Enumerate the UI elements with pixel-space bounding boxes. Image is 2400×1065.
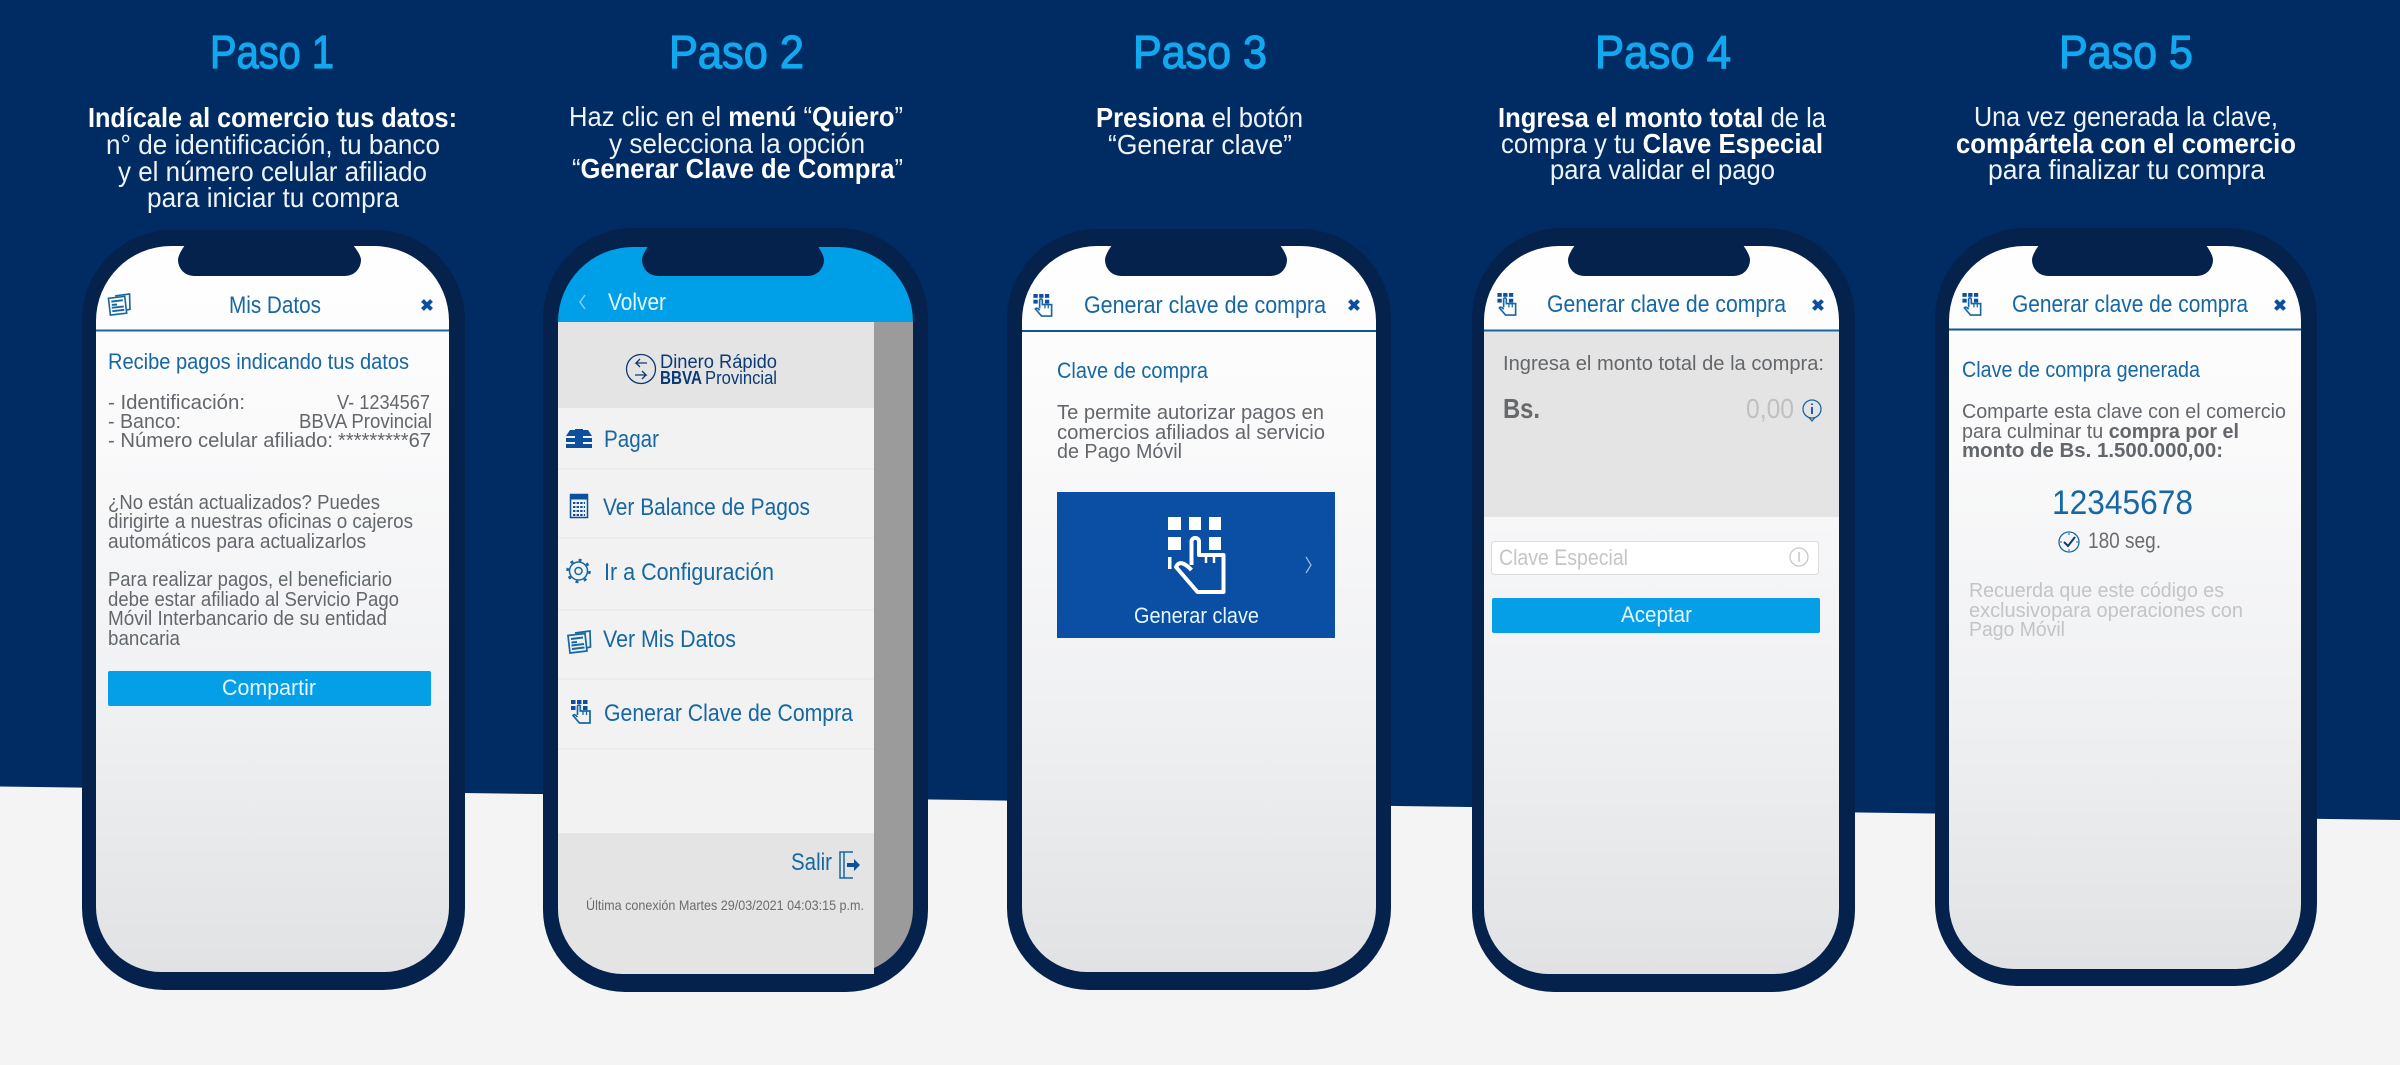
phone 5: generated key (1935, 228, 2317, 986)
paragraph: description: comercios afiliados al servicio (1057, 422, 1325, 444)
data list: - Número celular afiliado: (108, 430, 333, 452)
action card: Generar clave (1057, 492, 1335, 638)
subheading: Clave de compra generada (1962, 357, 2201, 382)
icon: clock (2059, 532, 2079, 552)
phone screen (1484, 246, 1839, 974)
heading: Paso 3: Paso 3 (1133, 26, 1267, 78)
phone frame (1935, 228, 2317, 986)
input: Clave Especial (1492, 542, 1818, 574)
data list (108, 392, 432, 452)
data list: *********67 (338, 430, 431, 452)
logo band (558, 322, 874, 408)
heading: Paso 2: Paso 2 (669, 26, 804, 78)
text block: step 2 instructions: “Generar Clave de Compra” (572, 153, 903, 184)
data list: V- 1234567 (337, 392, 430, 414)
heading: Paso 5: Paso 5 (2059, 26, 2193, 78)
step 3 column (1007, 26, 1391, 990)
paragraph: description: Te permite autorizar pagos en (1057, 402, 1324, 424)
footer band (558, 833, 874, 974)
icon: keypad with pointing hand (1168, 517, 1224, 592)
icon: keypad hand (1497, 293, 1516, 315)
paragraph: reminder: Recuerda que este código es (1969, 580, 2224, 602)
text block: step 3 instructions (1096, 102, 1303, 160)
data list: - Identificación: (108, 392, 245, 414)
paragraph: update notice: automáticos para actualizarlos (108, 531, 366, 553)
icon: close (2276, 300, 2284, 310)
icon: calculator (570, 494, 588, 518)
menu item: Ir a Configuración: Ir a Configuración (604, 559, 774, 586)
logo: Dinero Rápido BBVA Provincial: Provincial (705, 368, 777, 388)
step 5 column (1935, 26, 2317, 986)
paragraph: share key: monto de Bs. 1.500.000,00: (1962, 440, 2223, 462)
text block: step 2 instructions: y selecciona la opción (609, 128, 865, 159)
logo: Dinero Rápido BBVA Provincial (626, 352, 777, 388)
text block: step 3 instructions: “Generar clave” (1108, 129, 1292, 160)
data list: - Banco: (108, 411, 181, 433)
phone frame (1007, 229, 1391, 990)
text block: step 4 instructions: compra y tu Clave Especial (1501, 128, 1823, 159)
text block: step 5 instructions (1956, 101, 2296, 185)
screen title: Generar clave de compra (1084, 292, 1327, 319)
button: Aceptar (1492, 598, 1820, 633)
step 4 column (1472, 26, 1855, 992)
paragraph: update notice: dirigirte a nuestras oficinas o cajeros (108, 511, 413, 533)
paragraph: share key: para culminar tu compra por el (1962, 421, 2239, 443)
exit link: Salir (791, 849, 832, 876)
phone notch (2032, 245, 2213, 276)
phone screen (1022, 246, 1376, 972)
text block: step 1 instructions: n° de identificación, tu banco (106, 129, 440, 160)
currency label: Bs. (1503, 393, 1540, 424)
amount prompt: Ingresa el monto total de la compra: (1503, 353, 1824, 375)
paragraph: beneficiary notice: debe estar afiliado al Servicio Pago (108, 589, 399, 611)
icon: chevron (1306, 557, 1311, 573)
button: Aceptar: Aceptar (1621, 602, 1692, 627)
icon: close (422, 300, 432, 310)
paragraph: update notice (108, 492, 413, 553)
icon: keypad hand (1962, 293, 1981, 315)
text block: step 1 instructions (88, 102, 457, 213)
menu item: Pagar: Pagar (604, 426, 659, 453)
icon: gear (568, 560, 590, 582)
step 2 column (543, 26, 928, 992)
phone notch (642, 245, 824, 276)
phone notch (178, 245, 361, 276)
text block: step 3 instructions: Presiona el botón (1096, 102, 1303, 133)
icon: close (1814, 300, 1822, 310)
phone frame (1472, 228, 1855, 992)
phone notch (1105, 245, 1287, 276)
phone frame (82, 230, 465, 990)
icon: pay (566, 429, 592, 448)
screen title: Generar clave de compra (2012, 291, 2249, 318)
paragraph: share key: Comparte esta clave con el comercio (1962, 401, 2286, 423)
amount band (1484, 331, 1839, 517)
countdown: 180 seg. (2088, 528, 2161, 553)
menu item: Ver Balance de Pagos: Ver Balance de Pagos (603, 494, 810, 521)
button: Compartir: Compartir (222, 675, 316, 700)
text block: step 4 instructions: para validar el pago (1550, 154, 1775, 185)
menu background (558, 408, 874, 833)
phone 1: Mis Datos (82, 230, 465, 990)
subheading: Recibe pagos indicando tus datos (108, 349, 409, 374)
phone frame (543, 228, 928, 992)
icon: close (1350, 300, 1358, 310)
text block: step 2 instructions (569, 101, 903, 184)
icon: keypad hand (571, 700, 590, 723)
phone 4: amount and key (1472, 228, 1855, 992)
overlay shade (874, 322, 913, 968)
text block: step 5 instructions: para finalizar tu compra (1988, 154, 2265, 185)
paragraph: update notice: ¿No están actualizados? Puedes (108, 492, 380, 514)
paragraph: beneficiary notice: Móvil Interbancario de su entidad (108, 608, 387, 630)
amount value: 0,00 (1746, 393, 1794, 424)
generated key number: 12345678 (2052, 484, 2193, 522)
paragraph: reminder (1969, 580, 2243, 641)
heading: Paso 4: Paso 4 (1595, 26, 1731, 78)
text block: step 1 instructions: Indícale al comercio tus datos: (88, 102, 457, 133)
data list: BBVA Provincial (299, 411, 432, 433)
input: Clave Especial: Clave Especial (1499, 545, 1628, 570)
paragraph: description (1057, 402, 1325, 463)
phone 2: menu (543, 228, 928, 992)
text block: step 1 instructions: para iniciar tu compra (147, 182, 399, 213)
top bar (558, 247, 913, 322)
action card: Generar clave: Generar clave (1134, 603, 1259, 628)
screen title: Generar clave de compra (1547, 291, 1787, 318)
menu item: Ver Mis Datos: Ver Mis Datos (603, 626, 736, 653)
icon: documents (568, 631, 590, 653)
paragraph: description: de Pago Móvil (1057, 441, 1182, 463)
last connection text: Última conexión Martes 29/03/2021 04:03:15 p.m. (586, 897, 864, 913)
paragraph: share key (1962, 401, 2286, 462)
text block: step 5 instructions: compártela con el comercio (1956, 128, 2296, 159)
button: Compartir (108, 671, 431, 706)
heading: Paso 1: Paso 1 (210, 26, 334, 78)
paragraph: beneficiary notice: Para realizar pagos, el beneficiario (108, 569, 392, 591)
background: light lower band (0, 786, 2400, 1065)
paragraph: reminder: exclusivopara operaciones con (1969, 600, 2243, 622)
screen title: Mis Datos (229, 292, 321, 319)
phone 3: generate key (1007, 229, 1391, 990)
phone screen (1949, 246, 2301, 969)
paragraph: beneficiary notice: bancaria (108, 628, 181, 650)
text block: step 4 instructions: Ingresa el monto total de la (1498, 102, 1826, 133)
paragraph: beneficiary notice (108, 569, 399, 650)
icon: back chevron (580, 295, 585, 309)
subheading: Clave de compra (1057, 358, 1209, 383)
text block: step 4 instructions (1498, 102, 1826, 185)
back label: Volver (608, 289, 666, 316)
phone screen (96, 246, 449, 972)
icon: documents (108, 294, 130, 315)
text block: step 1 instructions: y el número celular afiliado (118, 156, 427, 187)
icon: keypad hand (1033, 294, 1052, 316)
text block: step 5 instructions: Una vez generada la clave, (1974, 101, 2278, 132)
logo: Dinero Rápido BBVA Provincial: BBVA (660, 368, 702, 388)
phone notch (1568, 245, 1750, 276)
logo: Dinero Rápido BBVA Provincial: Dinero Rápido (660, 352, 777, 373)
icon: exit (840, 852, 860, 878)
text block: step 2 instructions: Haz clic en el menú “Quiero” (569, 101, 903, 132)
step 1 column (82, 26, 465, 990)
icon: info (1803, 400, 1821, 421)
paragraph: reminder: Pago Móvil (1969, 619, 2065, 641)
menu item: Generar Clave de Compra: Generar Clave de Compra (604, 700, 854, 727)
